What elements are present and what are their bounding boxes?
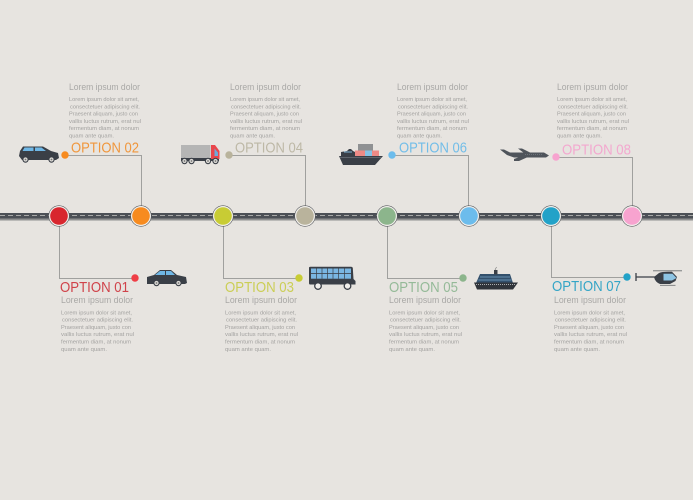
panel: option 01: Praesent aliquam, justo con xyxy=(61,325,131,331)
panel: option 03: Praesent aliquam, justo con xyxy=(225,325,295,331)
panel: option 01 xyxy=(60,274,139,353)
panel: option 07: vallis luctus rutrum, erat nul xyxy=(554,332,627,338)
panel: option 01: fermentum diam, at nonum xyxy=(61,340,131,346)
road xyxy=(0,213,693,220)
panel: option 02: Lorem ipsum dolor sit amet, xyxy=(69,97,139,103)
panel: option 07: consectetuer adipiscing elit. xyxy=(555,318,626,324)
node: option 04 xyxy=(295,206,315,226)
panel: option 08: fermentum diam, at nonum xyxy=(557,126,627,132)
icon: container ship xyxy=(339,144,383,165)
panel: option 04: quam ante quam. xyxy=(230,134,275,140)
panel: option 03: quam ante quam. xyxy=(225,347,271,353)
panel: option 07: Praesent aliquam, justo con xyxy=(554,325,624,331)
panel: option 08: Praesent aliquam, justo con xyxy=(557,112,626,118)
panel: option 04: Lorem ipsum dolor sit amet, xyxy=(230,97,300,103)
panel: option 01: Lorem ipsum dolor xyxy=(61,295,133,306)
panel: option 08: vallis luctus rutrum, erat nul xyxy=(557,119,629,125)
icon: airplane xyxy=(500,148,549,161)
icon: helicopter xyxy=(636,271,682,285)
panel: option 03 xyxy=(225,274,303,353)
panel: option 05: quam ante quam. xyxy=(389,347,435,353)
panel: option 02: quam ante quam. xyxy=(69,134,114,140)
panel: option 03: fermentum diam, at nonum xyxy=(225,340,295,346)
panel: option 07: OPTION 07 xyxy=(552,279,621,295)
panel: option 02 xyxy=(61,82,141,159)
panel: option 08: Lorem ipsum dolor sit amet, xyxy=(557,97,627,103)
panel: option 06: fermentum diam, at nonum xyxy=(397,126,467,132)
panel: option 06 xyxy=(388,82,469,159)
panel: option 02: Lorem ipsum dolor xyxy=(69,82,140,93)
panel: option 05: OPTION 05 xyxy=(389,280,458,296)
panel: option 03: vallis luctus rutrum, erat nul xyxy=(225,332,298,338)
panel: option 01: OPTION 01 xyxy=(60,280,129,296)
panel: option 03: consectetuer adipiscing elit. xyxy=(226,318,297,324)
panel: option 06: quam ante quam. xyxy=(397,134,442,140)
panel: option 04: Lorem ipsum dolor xyxy=(230,82,301,93)
panel: option 06: Praesent aliquam, justo con xyxy=(397,112,466,118)
connector lines xyxy=(60,156,632,278)
panel: option 03: Lorem ipsum dolor xyxy=(225,295,297,306)
panel: option 02: consectetuer adipiscing elit. xyxy=(70,104,140,110)
panel: option 07 xyxy=(552,273,631,353)
panel: option 05 xyxy=(389,274,467,353)
panel: option 02: fermentum diam, at nonum xyxy=(69,126,139,132)
node: option 07 xyxy=(541,206,561,226)
node: option 03 xyxy=(213,206,233,226)
panel: option 05: Praesent aliquam, justo con xyxy=(389,325,459,331)
panel: option 05: consectetuer adipiscing elit. xyxy=(390,318,461,324)
panel: option 07: Lorem ipsum dolor sit amet, xyxy=(554,310,625,316)
icon: car xyxy=(147,270,187,286)
panel: option 04: OPTION 04 xyxy=(235,140,303,156)
panel: option 07: Lorem ipsum dolor xyxy=(554,295,626,306)
panel: option 04: vallis luctus rutrum, erat nul xyxy=(230,119,302,125)
panel: option 01: vallis luctus rutrum, erat nul xyxy=(61,332,134,338)
node: option 06 xyxy=(459,206,479,226)
panel: option 01: quam ante quam. xyxy=(61,347,107,353)
panel: option 08: OPTION 08 xyxy=(562,142,631,158)
panel: option 06: Lorem ipsum dolor sit amet, xyxy=(397,97,467,103)
panel: option 05: vallis luctus rutrum, erat nul xyxy=(389,332,462,338)
panel: option 06: OPTION 06 xyxy=(399,140,467,156)
panel: option 08: consectetuer adipiscing elit. xyxy=(558,104,628,110)
node: option 02 xyxy=(131,206,151,226)
panel: option 06: consectetuer adipiscing elit. xyxy=(398,104,468,110)
panel: option 03: Lorem ipsum dolor sit amet, xyxy=(225,310,296,316)
node: option 08 xyxy=(622,206,642,226)
panel: option 01: Lorem ipsum dolor sit amet, xyxy=(61,310,132,316)
panel: option 02: OPTION 02 xyxy=(71,140,139,156)
node: option 05 xyxy=(377,206,397,226)
icon: SUV xyxy=(19,146,59,163)
panel: option 01: consectetuer adipiscing elit. xyxy=(62,318,133,324)
panel: option 04 xyxy=(225,82,303,159)
panel: option 08: Lorem ipsum dolor xyxy=(557,82,628,93)
panel: option 02: vallis luctus rutrum, erat nul xyxy=(69,119,141,125)
panel: option 08: quam ante quam. xyxy=(557,134,602,140)
panel: option 05: Lorem ipsum dolor sit amet, xyxy=(389,310,460,316)
panel: option 04: Praesent aliquam, justo con xyxy=(230,112,299,118)
panel: option 08 xyxy=(552,82,631,161)
panel: option 04: fermentum diam, at nonum xyxy=(230,126,300,132)
panel: option 03: OPTION 03 xyxy=(225,280,294,296)
panel: option 05: fermentum diam, at nonum xyxy=(389,340,459,346)
panel: option 07: quam ante quam. xyxy=(554,347,600,353)
node: option 01 xyxy=(49,206,69,226)
panel: option 06: Lorem ipsum dolor xyxy=(397,82,468,93)
panel: option 05: Lorem ipsum dolor xyxy=(389,295,461,306)
panel: option 02: Praesent aliquam, justo con xyxy=(69,112,138,118)
icon: cruise ship xyxy=(474,267,518,290)
panel: option 07: fermentum diam, at nonum xyxy=(554,340,624,346)
panel: option 04: consectetuer adipiscing elit. xyxy=(231,104,301,110)
icon: truck xyxy=(181,145,220,164)
icon: bus xyxy=(309,267,356,289)
panel: option 06: vallis luctus rutrum, erat nul xyxy=(397,119,469,125)
